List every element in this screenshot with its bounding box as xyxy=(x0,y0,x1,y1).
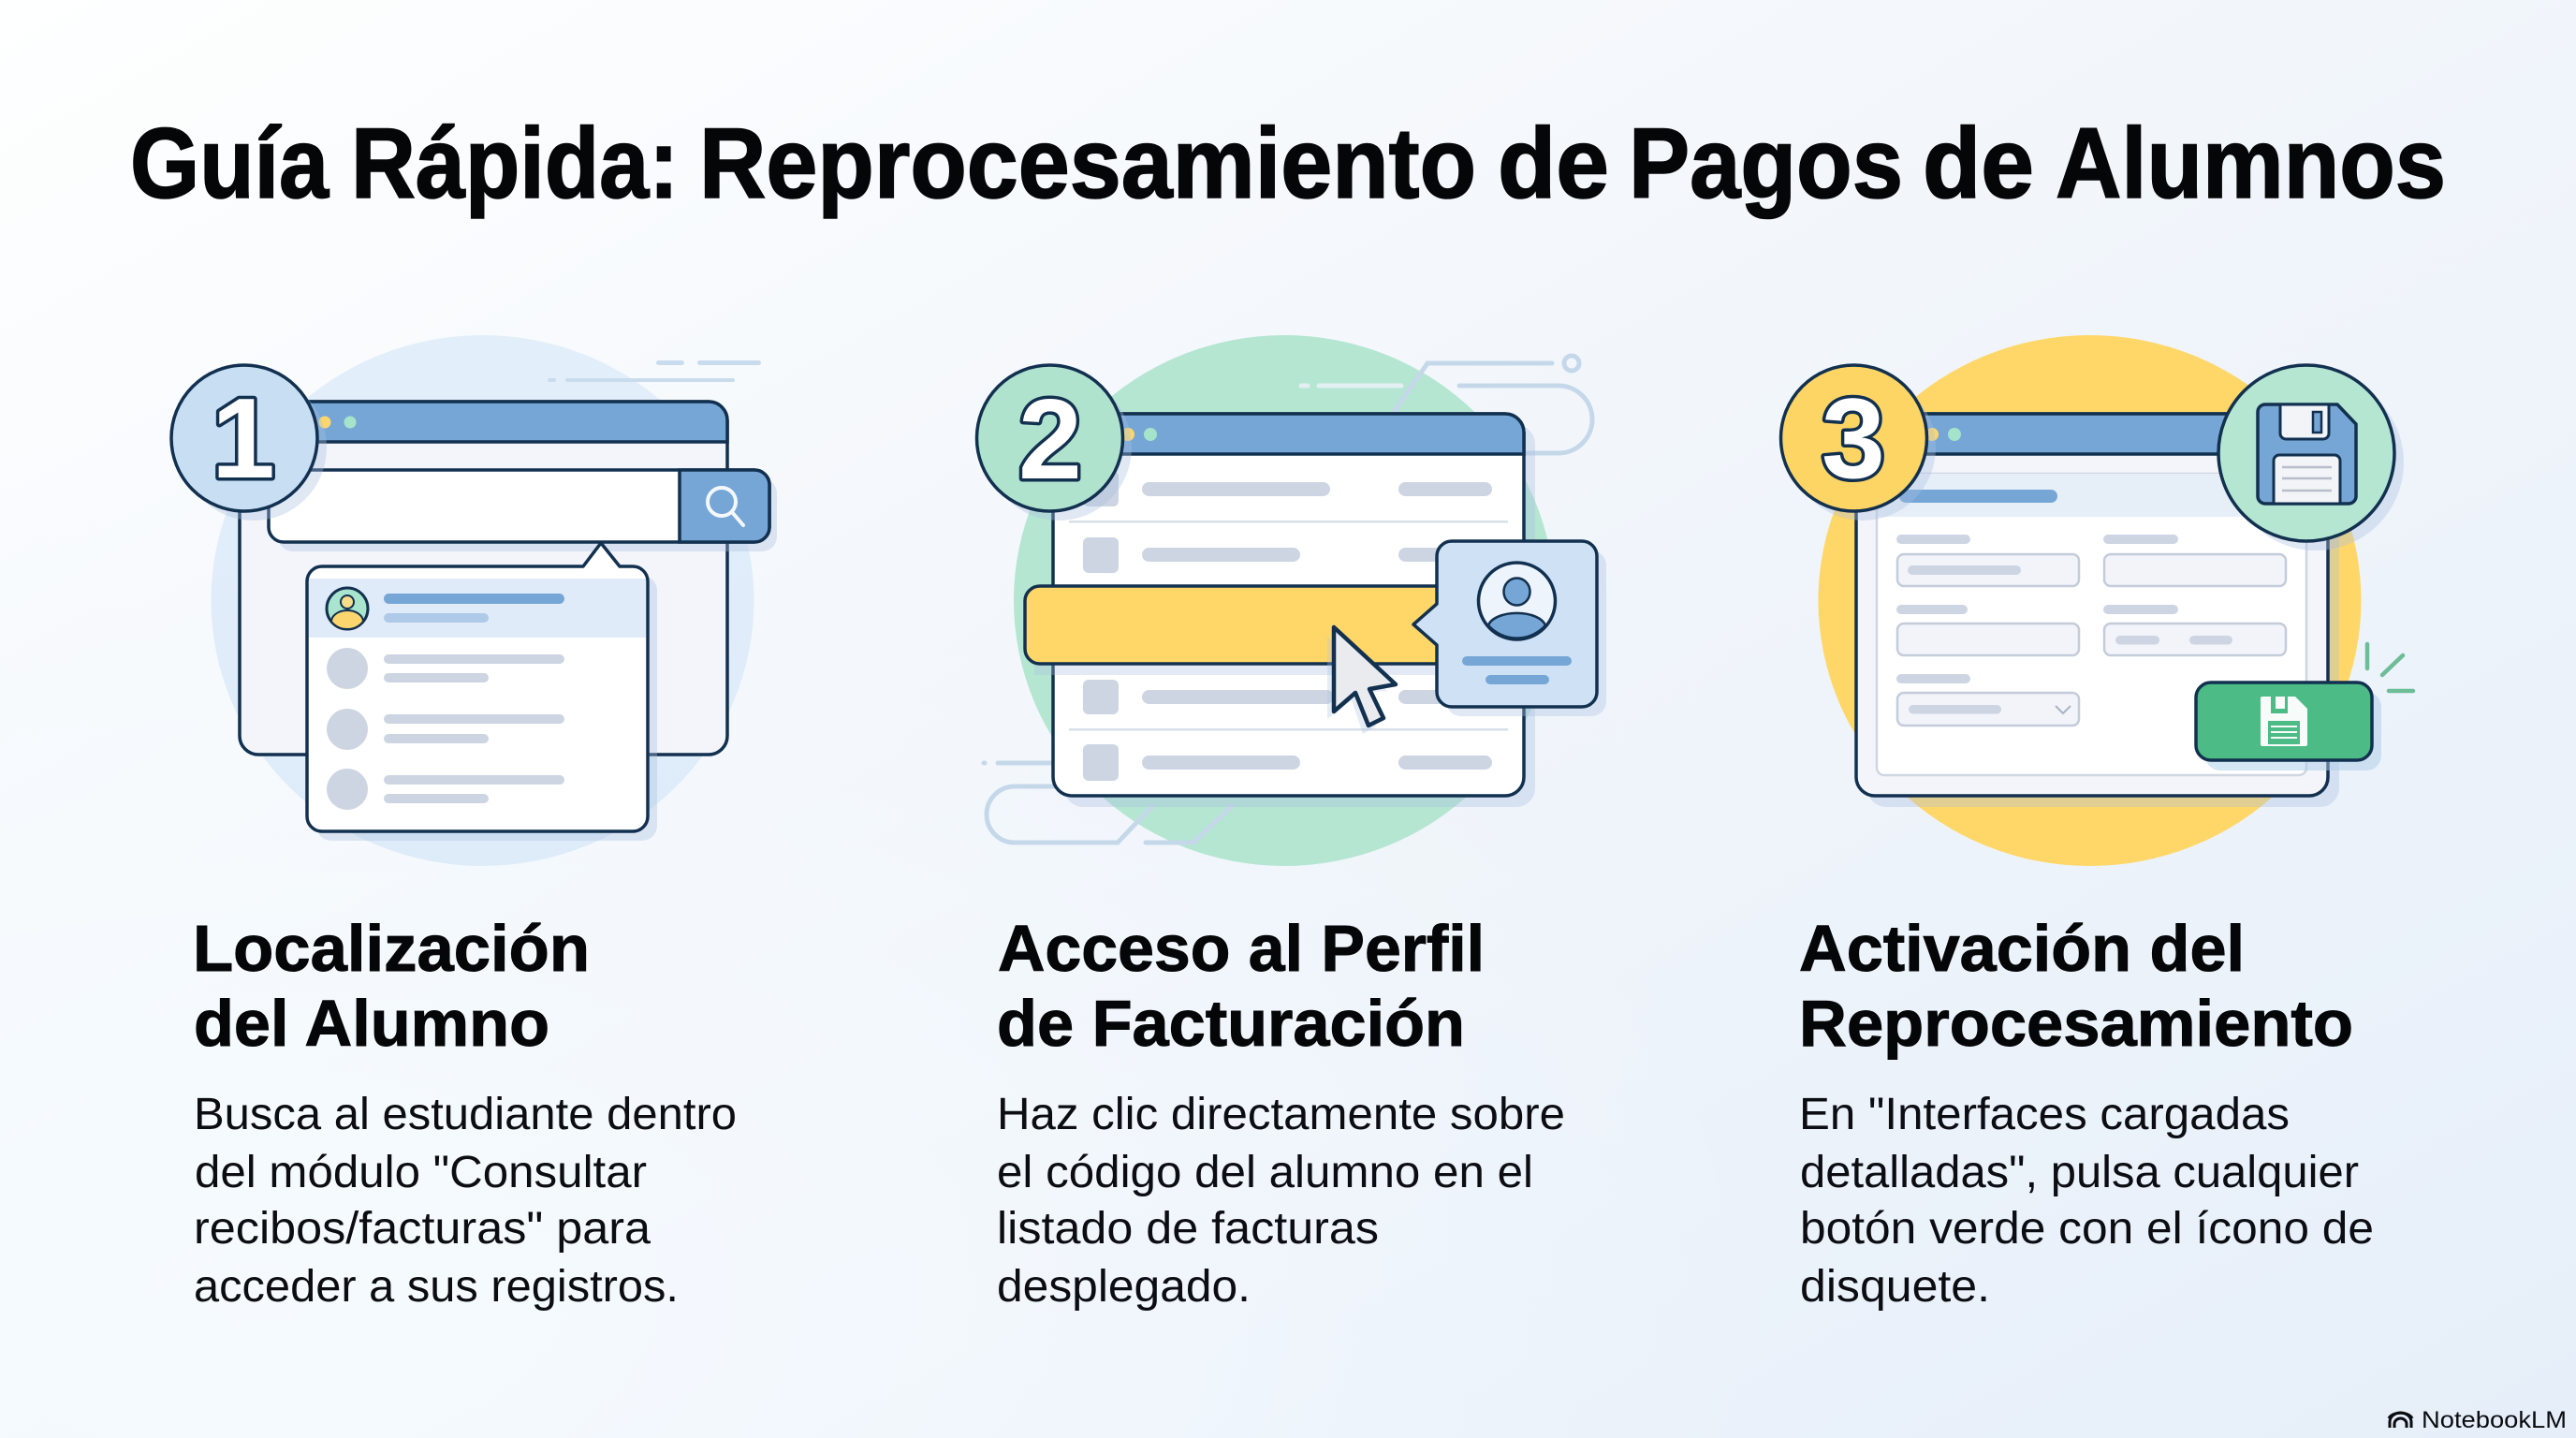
heading 1: del Alumno xyxy=(194,987,549,1060)
description 1: Busca al estudiante dentro xyxy=(194,1089,737,1139)
text block: step 2 xyxy=(997,912,1565,1312)
number badge 1: 1 xyxy=(212,374,275,502)
title: de xyxy=(1923,107,2034,219)
background circle 1 xyxy=(212,335,754,866)
form fields xyxy=(1896,535,2286,726)
heading 3: Reprocesamiento xyxy=(1799,987,2353,1060)
panel: step 2 illustration xyxy=(977,335,1606,866)
invoice list window xyxy=(1053,414,1535,807)
icon: floppy disk xyxy=(2258,404,2356,504)
search bar xyxy=(269,470,777,551)
description 3 xyxy=(1799,1089,2374,1312)
description 2: el código del alumno en el xyxy=(997,1147,1533,1197)
icon: white floppy disk xyxy=(2261,697,2307,746)
highlighted result row xyxy=(309,579,646,638)
number badge 3: 3 xyxy=(1822,374,1885,502)
form window xyxy=(1856,414,2339,807)
form panel xyxy=(1877,474,2306,775)
background circle 3 xyxy=(1818,335,2361,866)
description 1: acceder a sus registros. xyxy=(194,1261,679,1312)
watermark: NotebookLM: NotebookLM xyxy=(2422,1407,2567,1433)
icon: mouse cursor xyxy=(1327,627,1396,734)
number badge 2 xyxy=(977,365,1132,521)
heading 1: Localización xyxy=(193,912,590,985)
title: de xyxy=(1498,107,1609,219)
sparkle marks xyxy=(2367,644,2413,691)
decorative circuit lines 2 xyxy=(984,356,1592,843)
panel: step 1 illustration xyxy=(171,335,777,866)
description 2 xyxy=(997,1089,1565,1312)
decorative lines 1 xyxy=(548,360,761,382)
description 3: botón verde con el ícono de xyxy=(1800,1203,2374,1254)
title: Rápida: xyxy=(351,107,679,219)
title xyxy=(130,107,2446,219)
description 1: del módulo "Consultar xyxy=(195,1147,647,1197)
heading 3: Activación del xyxy=(1799,912,2245,985)
icon: magnifier xyxy=(708,488,743,525)
heading 2 xyxy=(997,912,1485,1060)
number badge 1 xyxy=(171,365,327,521)
description 3: disquete. xyxy=(1800,1261,1990,1312)
search results dropdown xyxy=(307,543,657,841)
description 3: detalladas", pulsa cualquier xyxy=(1800,1147,2359,1197)
description 2: listado de facturas xyxy=(997,1203,1379,1254)
icon: profile avatar xyxy=(1479,563,1556,639)
panel: step 3 illustration xyxy=(1780,335,2413,866)
icon: NotebookLM logo xyxy=(2389,1413,2412,1428)
title: Pagos xyxy=(1629,107,1903,219)
title: Guía xyxy=(130,107,329,219)
browser window 1 xyxy=(240,402,727,755)
save icon circle xyxy=(2218,365,2404,550)
icon: student avatar xyxy=(327,588,368,629)
description 2: desplegado. xyxy=(997,1261,1251,1312)
invoice rows xyxy=(1069,471,1508,781)
text block: step 1 xyxy=(193,912,737,1312)
description 2: Haz clic directamente sobre xyxy=(997,1089,1565,1139)
highlighted yellow row xyxy=(1025,586,1456,675)
number badge 3 xyxy=(1780,365,1936,521)
heading 2: Acceso al Perfil xyxy=(998,912,1485,985)
description 1 xyxy=(194,1089,737,1312)
text block: step 3 xyxy=(1799,912,2374,1312)
heading 1 xyxy=(193,912,590,1060)
description 3: En "Interfaces cargadas xyxy=(1799,1089,2290,1139)
background circle 2 xyxy=(1014,335,1555,866)
green save button xyxy=(2196,682,2381,770)
result rows xyxy=(327,648,564,810)
heading 3 xyxy=(1799,912,2353,1060)
heading 2: de Facturación xyxy=(997,987,1465,1060)
title: Alumnos xyxy=(2056,107,2446,219)
profile card xyxy=(1413,541,1606,716)
description 1: recibos/facturas" para xyxy=(194,1203,651,1254)
number badge 2: 2 xyxy=(1018,375,1082,503)
title: Reprocesamiento xyxy=(699,107,1476,219)
